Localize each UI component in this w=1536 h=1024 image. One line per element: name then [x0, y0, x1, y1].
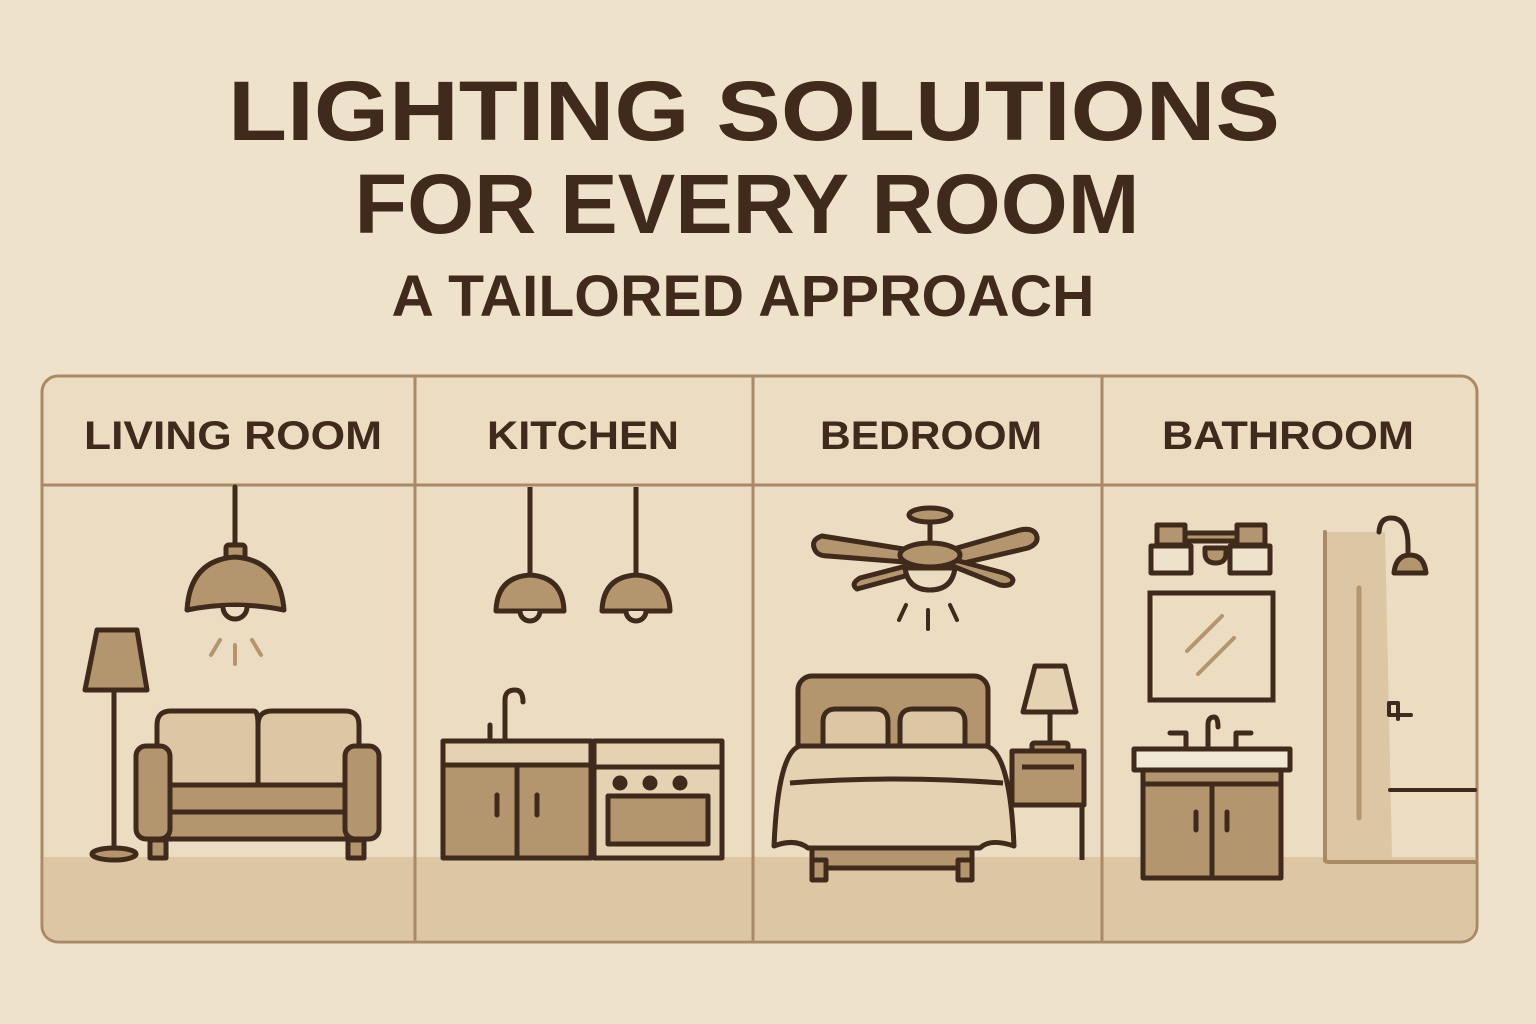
- heading: living room: LIVING ROOM: [84, 414, 382, 458]
- heading: bedroom: BEDROOM: [820, 414, 1042, 458]
- heading: kitchen: KITCHEN: [487, 414, 679, 458]
- icon: bed: [774, 676, 1014, 880]
- icon: living room pendant lamp: [187, 487, 284, 664]
- icon: vanity light: [1151, 525, 1270, 573]
- title: LIGHTING SOLUTIONS: [228, 64, 1280, 158]
- heading: bathroom: BATHROOM: [1162, 414, 1414, 458]
- subtitle: A TAILORED APPROACH: [392, 264, 1094, 329]
- icon: shower: [1325, 518, 1475, 862]
- icon: floor lamp: [85, 630, 147, 860]
- icon: kitchen counter and stove: [443, 690, 722, 858]
- panel: rooms grid: [42, 376, 1477, 942]
- title: FOR EVERY ROOM: [354, 157, 1140, 251]
- icon: mirror: [1150, 593, 1273, 700]
- title: [228, 64, 1280, 251]
- icon: kitchen pendants: [496, 487, 670, 621]
- icon: nightstand with lamp: [1012, 666, 1084, 860]
- icon: sofa: [136, 711, 379, 858]
- icon: sink vanity: [1134, 717, 1290, 878]
- icon: ceiling fan: [814, 508, 1037, 629]
